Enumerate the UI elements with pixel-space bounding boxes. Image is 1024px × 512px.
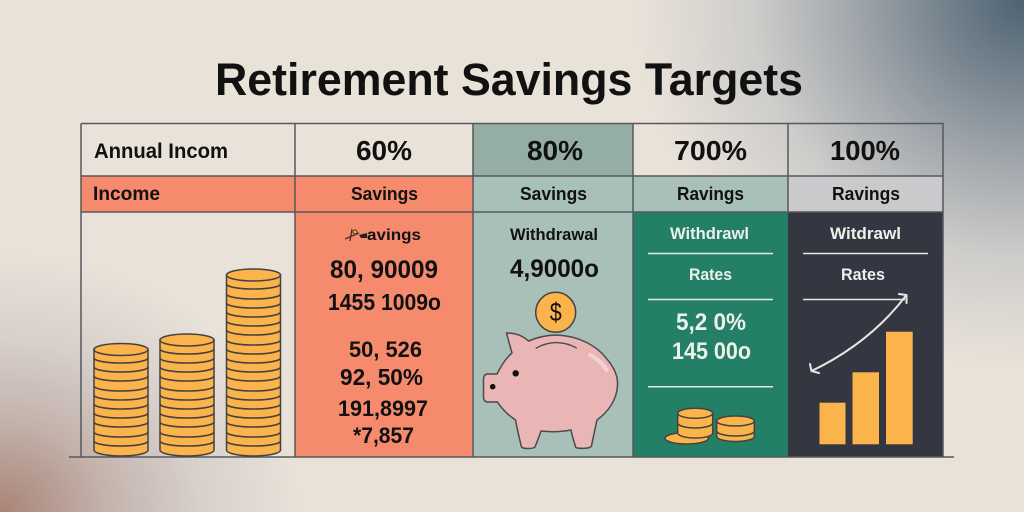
panel: table cell fills	[81, 123, 943, 457]
title: Retirement Savings Targets	[215, 54, 803, 105]
header row: 100%	[830, 135, 900, 166]
savings values: 92, 50%	[340, 364, 423, 390]
green values: 145 00o	[672, 338, 751, 365]
subheader row: Ravings	[677, 183, 744, 204]
withdrawal label: Withdrawal	[510, 226, 598, 244]
panel: savings column	[328, 227, 441, 448]
withdrawal value: 4,9000o	[510, 255, 599, 283]
icon: small coins	[665, 408, 754, 444]
icon: coin stacks	[94, 269, 280, 456]
icon: dollar coin: $	[550, 297, 562, 327]
panel: green rates column	[648, 225, 773, 444]
icon: savings scribble	[345, 229, 367, 241]
green column dividers	[648, 254, 773, 387]
savings values: 50, 526	[349, 337, 422, 362]
header row: 80%	[527, 135, 583, 166]
subheader row	[93, 183, 900, 205]
baseline	[69, 456, 954, 458]
header row: Annual Incom	[94, 140, 228, 163]
savings label: avings	[367, 227, 421, 244]
dark withdrawal label: Witdrawl	[830, 225, 901, 243]
bar chart	[820, 332, 913, 444]
savings values	[328, 256, 441, 448]
header row: 60%	[356, 135, 412, 166]
subheader row: Income	[93, 183, 160, 205]
savings values: *7,857	[353, 423, 414, 448]
savings values: 1455 1009o	[328, 289, 441, 315]
green rates label: Rates	[689, 266, 732, 284]
savings values: 191,8997	[338, 396, 428, 421]
panel: withdrawal column	[484, 226, 618, 448]
header row: 700%	[674, 135, 747, 166]
dark rates label: Rates	[841, 266, 885, 284]
subheader row: Savings	[520, 183, 587, 204]
table grid	[81, 123, 943, 457]
dark column dividers	[803, 254, 928, 300]
icon: dollar coin	[536, 292, 576, 332]
header row	[94, 135, 900, 166]
arrow: growth curve	[810, 294, 906, 373]
green withdrawal label: Withdrawl	[670, 225, 749, 243]
subheader row: Ravings	[832, 183, 900, 204]
icon: piggy bank	[484, 333, 618, 448]
green values	[672, 309, 751, 365]
savings values: 80, 90009	[330, 256, 438, 284]
green values: 5,2 0%	[676, 309, 746, 336]
panel: dark rates column	[803, 225, 928, 444]
subheader row: Savings	[351, 183, 418, 204]
